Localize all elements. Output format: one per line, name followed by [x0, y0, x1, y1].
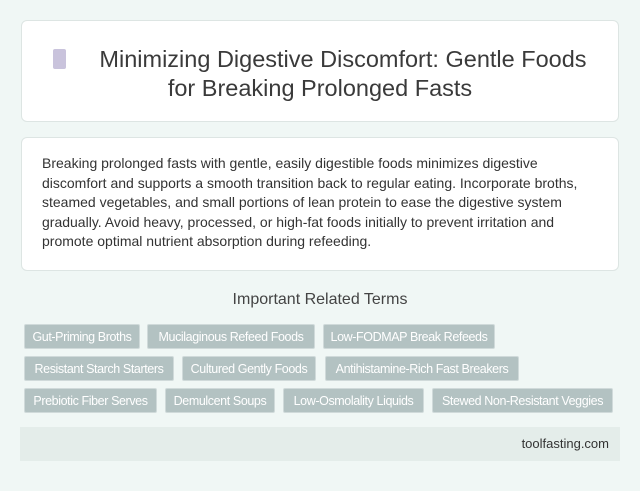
title card	[21, 20, 619, 122]
tags: Low-FODMAP Break Refeeds	[331, 330, 487, 344]
title	[53, 46, 587, 101]
title: for Breaking Prolonged Fasts	[168, 75, 472, 101]
tags: Cultured Gently Foods	[191, 362, 307, 376]
title: Minimizing Digestive Discomfort: Gentle Foods	[99, 46, 587, 72]
tags: Gut-Priming Broths	[32, 330, 132, 344]
tags: Low-Osmolality Liquids	[294, 394, 413, 408]
description text: Breaking prolonged fasts with gentle, easily digestible foods minimizes digestive discomfort and supports a smooth transition back to regular eating. Incorporate broths, steamed vegetables, and small portions of lean protein to ease the digestive system gradually. Avoid heavy, processed, or high-fat foods initially to prevent irritation and promote optimal nutrient absorption during refeeding.	[42, 155, 577, 249]
description card	[21, 137, 619, 271]
tags: Stewed Non-Resistant Veggies	[442, 394, 603, 408]
tags: Demulcent Soups	[174, 394, 266, 408]
tags: Resistant Starch Starters	[35, 362, 163, 376]
tags: Antihistamine-Rich Fast Breakers	[336, 362, 508, 376]
tags: Mucilaginous Refeed Foods	[159, 330, 303, 344]
tags: Prebiotic Fiber Serves	[33, 394, 148, 408]
footer text: toolfasting.com	[522, 436, 609, 451]
footer	[20, 427, 620, 461]
heading: related terms: Important Related Terms	[233, 291, 407, 308]
